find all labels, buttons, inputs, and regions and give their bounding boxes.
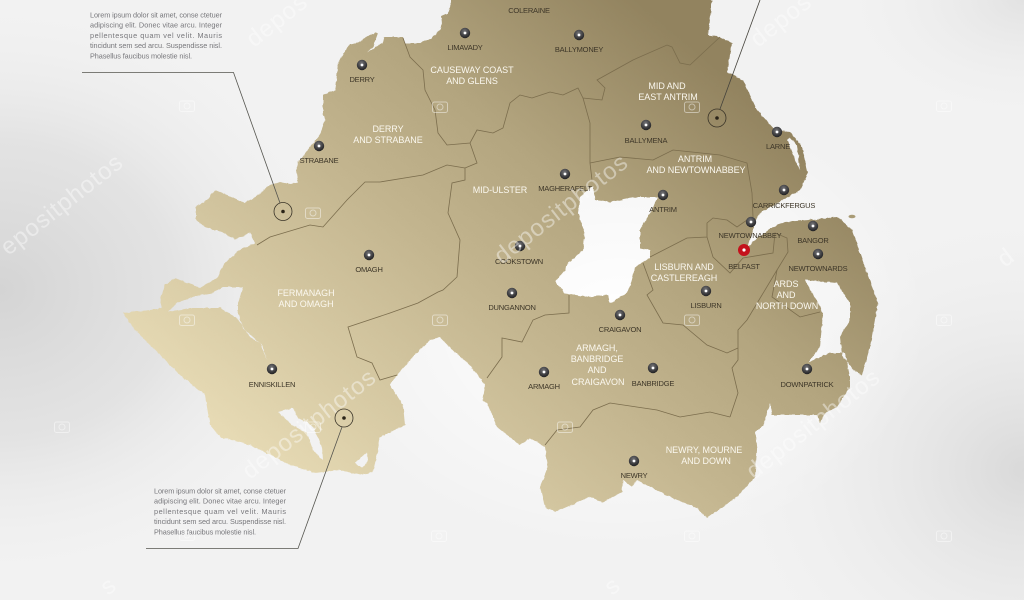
- region labels: CRAIGAVON: [572, 377, 624, 387]
- city labels: DOWNPATRICK: [781, 380, 834, 389]
- text block: bottom callout: Lorem ipsum dolor sit amet, conse ctetuer: [154, 486, 287, 496]
- region labels: ARMAGH,: [576, 343, 618, 353]
- watermarks: s: [95, 571, 122, 600]
- text block: bottom callout: tincidunt sem sed arcu. Suspendisse nisl.: [154, 517, 286, 526]
- text block: bottom callout: adipiscing elit. Donec vitae arcu. Integer: [154, 496, 287, 506]
- region labels: EAST ANTRIM: [638, 92, 698, 102]
- city labels: ARMAGH: [528, 382, 560, 391]
- region labels: AND NEWTOWNABBEY: [646, 165, 746, 175]
- region labels: AND GLENS: [446, 76, 498, 86]
- city labels: OMAGH: [355, 265, 383, 274]
- watermarks: depositphotos: [741, 363, 886, 485]
- city labels: NEWRY: [621, 471, 648, 480]
- city labels: STRABANE: [300, 156, 339, 165]
- text block: bottom callout: Phasellus faucibus molestie nisl.: [154, 528, 256, 536]
- text block: bottom callout: pellentesque quam vel velit. Mauris: [154, 507, 286, 516]
- text block: top-left callout: Phasellus faucibus molestie nisl.: [90, 52, 192, 60]
- city labels: CRAIGAVON: [599, 325, 641, 334]
- city labels: BELFAST: [728, 262, 760, 271]
- Copeland island: [848, 215, 856, 218]
- city labels: [249, 6, 848, 480]
- land patch at top edge: [451, 0, 711, 8]
- city labels: LIMAVADY: [447, 43, 483, 52]
- city labels: CARRICKFERGUS: [753, 201, 815, 210]
- text block: top-left callout: adipiscing elit. Donec vitae arcu. Integer: [90, 20, 223, 30]
- watermarks: depositphotos: [237, 363, 382, 485]
- callout: north-west marker and leader: [82, 72, 292, 220]
- region labels: AND OMAGH: [278, 299, 334, 309]
- city labels: COOKSTOWN: [495, 257, 543, 266]
- city labels: BALLYMENA: [625, 136, 668, 145]
- city labels: NEWTOWNABBEY: [719, 231, 782, 240]
- city labels: BALLYMONEY: [555, 45, 603, 54]
- region labels: ARDS: [774, 279, 798, 289]
- city labels: DUNGANNON: [488, 303, 536, 312]
- land mass with lakes: [123, 0, 878, 518]
- watermarks: s: [599, 571, 626, 600]
- text block: top-left callout: tincidunt sem sed arcu. Suspendisse nisl.: [90, 41, 222, 50]
- text block: top-left callout: Lorem ipsum dolor sit amet, conse ctetuer: [90, 10, 223, 20]
- region labels: DERRY: [372, 124, 404, 134]
- city labels: BANGOR: [797, 236, 829, 245]
- city labels: DERRY: [349, 75, 375, 84]
- map of Northern Ireland: [123, 0, 878, 518]
- region labels: AND DOWN: [681, 456, 731, 466]
- region labels: BANBRIDGE: [571, 354, 623, 364]
- region labels: LISBURN AND: [654, 262, 714, 272]
- city labels: BANBRIDGE: [632, 379, 674, 388]
- city labels: COLERAINE: [508, 6, 550, 15]
- region labels: CAUSEWAY COAST: [430, 65, 514, 75]
- watermarks: d: [992, 243, 1020, 273]
- city pins: [267, 28, 823, 466]
- city labels: LISBURN: [690, 301, 722, 310]
- region labels: MID AND: [648, 81, 686, 91]
- region labels: ANTRIM: [678, 154, 712, 164]
- district borders: [257, 37, 820, 445]
- callout: north-east marker and leader: [708, 0, 760, 127]
- region labels: CASTLEREAGH: [651, 273, 717, 283]
- region labels: AND: [777, 290, 796, 300]
- city labels: ENNISKILLEN: [249, 380, 295, 389]
- text block: top-left callout: [90, 10, 223, 60]
- region labels: MID-ULSTER: [473, 185, 528, 195]
- callout: south marker and leader: [146, 409, 353, 548]
- region labels: [277, 65, 818, 466]
- Belfast capital marker: [738, 244, 750, 256]
- city labels: MAGHERAFELT: [538, 184, 592, 193]
- city labels: NEWTOWNARDS: [789, 264, 848, 273]
- region labels: AND STRABANE: [353, 135, 423, 145]
- watermarks: depositphotos: [489, 148, 634, 270]
- region labels: AND: [588, 365, 607, 375]
- text block: bottom callout: [154, 486, 287, 536]
- city labels: ANTRIM: [649, 205, 677, 214]
- region labels: NORTH DOWN: [756, 301, 818, 311]
- region labels: FERMANAGH: [277, 288, 335, 298]
- region labels: NEWRY, MOURNE: [666, 445, 742, 455]
- text block: top-left callout: pellentesque quam vel velit. Mauris: [90, 31, 222, 40]
- city labels: LARNE: [766, 142, 790, 151]
